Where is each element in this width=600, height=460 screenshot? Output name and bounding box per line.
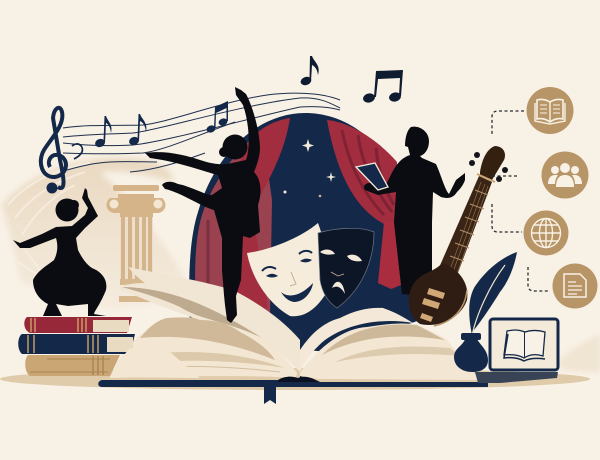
- open book foreground left pages over books: [110, 348, 200, 378]
- left flying page: [117, 267, 300, 372]
- navy book: [18, 334, 135, 354]
- icon: document circle: [552, 264, 598, 308]
- brush swoosh right: [558, 334, 600, 372]
- feather quill: [469, 252, 517, 336]
- guitar: [409, 146, 508, 326]
- icon: people circle: [542, 152, 588, 198]
- left dim curtain: [195, 130, 272, 318]
- left page stack: [110, 317, 297, 378]
- laptop: [475, 319, 558, 383]
- floating beamed notes: [362, 70, 403, 104]
- singer silhouette: [356, 127, 465, 296]
- music staff lines: [63, 93, 340, 172]
- right top page: [300, 308, 413, 372]
- bass clef: [72, 144, 82, 159]
- icon: open book circle: [526, 87, 574, 134]
- floating single note: [299, 56, 319, 87]
- tragedy mask: [318, 228, 374, 308]
- dancer on books: [13, 188, 106, 316]
- right curtain: [327, 120, 397, 225]
- treble clef: [41, 108, 66, 194]
- stars: [302, 139, 314, 152]
- spine shadow: [278, 377, 320, 382]
- column: [107, 185, 165, 302]
- music notes on staff: [94, 101, 228, 148]
- book cover: [98, 376, 488, 387]
- ink bottle: [454, 333, 488, 372]
- icon: book on laptop screen: [504, 330, 545, 361]
- bookmark ribbon: [264, 381, 276, 404]
- red book: [24, 317, 132, 333]
- right page stack: [300, 324, 480, 380]
- icon: globe circle: [524, 210, 568, 256]
- comedy mask: [247, 223, 329, 316]
- stack of books: [13, 188, 135, 376]
- stage arch: [189, 113, 420, 352]
- ground shadow ellipse: [0, 368, 590, 390]
- brush swoosh behind column: [2, 158, 190, 310]
- connector lines: [490, 111, 550, 291]
- tan book: [25, 355, 120, 376]
- left curtain bright: [225, 118, 290, 312]
- ballerina silhouette: [145, 87, 261, 323]
- open book: [98, 267, 488, 404]
